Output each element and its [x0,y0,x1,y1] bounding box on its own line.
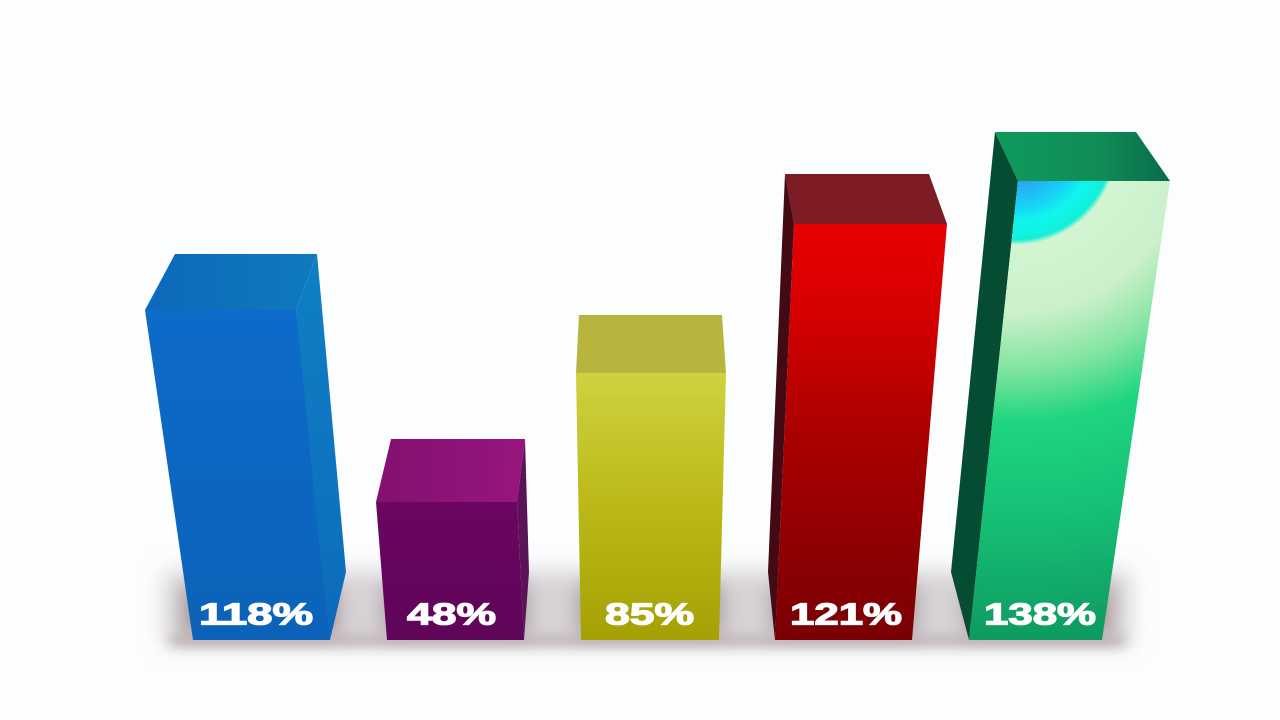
label: 85%: 85% [605,596,694,632]
bar: blue 118% [145,254,346,640]
floor shadow [165,572,1130,645]
bar: green 138% [951,132,1170,640]
label: 48%: 48% [407,596,496,632]
label: 121%: 121% [790,596,902,632]
bar: yellow 85% [576,315,726,640]
bar: red 121% [768,174,947,640]
label: 138%: 138% [984,596,1096,632]
3D bar chart [145,132,1170,656]
label: 118%: 118% [199,596,313,632]
bar: purple 48% [376,439,529,640]
